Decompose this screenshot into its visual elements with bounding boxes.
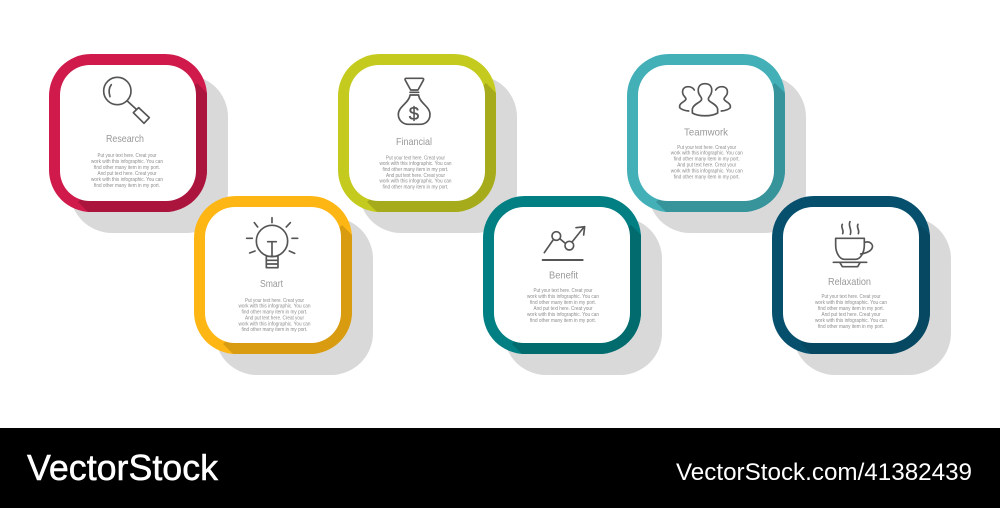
text block: teamwork: find other many item in my port. bbox=[674, 157, 740, 163]
text block: financial: find other many item in my port. bbox=[382, 167, 448, 173]
panel: benefit bbox=[483, 196, 662, 375]
text block: benefit: work with this infographic. You can bbox=[527, 312, 599, 318]
text block: smart: find other many item in my port. bbox=[242, 327, 308, 333]
footer band bbox=[0, 428, 1000, 508]
heading: smart: Smart bbox=[260, 278, 283, 290]
text block: benefit: work with this infographic. You can bbox=[527, 294, 599, 300]
text block: teamwork: And put text here. Creat your bbox=[677, 162, 737, 168]
text block: financial: And put text here. Creat your bbox=[386, 173, 445, 179]
icon: coffee cup bbox=[833, 222, 872, 267]
text block: smart: And put text here. Creat your bbox=[245, 315, 304, 321]
text block: smart bbox=[238, 298, 311, 333]
icon: team of people bbox=[680, 84, 730, 116]
text block: financial: work with this infographic. You can bbox=[380, 161, 452, 167]
text block: research: And put text here. Creat your bbox=[98, 171, 157, 177]
heading: teamwork: Teamwork bbox=[684, 127, 729, 139]
panel: teamwork bbox=[627, 54, 806, 233]
icon: money bag: $ bbox=[409, 103, 420, 124]
text block: relaxation: And put text here. Creat your bbox=[822, 312, 881, 318]
text block: smart: work with this infographic. You can bbox=[238, 304, 311, 310]
text block: teamwork: Put your text here. Creat your bbox=[677, 145, 736, 151]
text block: benefit: Put your text here. Creat your bbox=[534, 288, 593, 294]
text block: financial bbox=[380, 155, 452, 190]
panel: relaxation bbox=[772, 196, 951, 375]
text block: teamwork: work with this infographic. You can bbox=[671, 151, 743, 157]
text block: smart: Put your text here. Creat your bbox=[245, 298, 304, 304]
text block: relaxation: find other many item in my port. bbox=[818, 324, 884, 330]
text block: research bbox=[91, 153, 163, 189]
text block: teamwork bbox=[671, 145, 743, 180]
text block: research: find other many item in my port. bbox=[94, 183, 160, 189]
text block: relaxation: work with this infographic. You can bbox=[815, 318, 887, 324]
heading: benefit: Benefit bbox=[549, 270, 578, 282]
text block: financial: find other many item in my port. bbox=[382, 184, 448, 190]
panel: research bbox=[49, 54, 228, 233]
text block: financial: work with this infographic. You can bbox=[380, 179, 452, 185]
text block: research: work with this infographic. You can bbox=[91, 177, 163, 183]
footer logo text: VectorStock bbox=[27, 447, 219, 488]
footer image id: VectorStock.com/41382439 bbox=[676, 459, 972, 486]
heading: research: Research bbox=[106, 133, 144, 145]
text block: benefit: find other many item in my port. bbox=[530, 318, 596, 324]
text block: teamwork: find other many item in my port. bbox=[674, 174, 740, 180]
text block: research: find other many item in my port. bbox=[94, 165, 160, 171]
icon: growth chart bbox=[543, 227, 585, 260]
text block: relaxation: work with this infographic. You can bbox=[815, 300, 887, 306]
text block: relaxation: Put your text here. Creat your bbox=[822, 294, 881, 300]
heading: financial: Financial bbox=[396, 136, 432, 148]
text block: relaxation bbox=[815, 294, 887, 330]
icon: magnifying glass bbox=[104, 77, 149, 123]
text block: teamwork: work with this infographic. You can bbox=[671, 168, 743, 174]
text block: research: Put your text here. Creat your bbox=[98, 153, 157, 159]
text block: smart: work with this infographic. You can bbox=[238, 321, 311, 327]
icon: light bulb bbox=[247, 218, 298, 268]
heading: relaxation: Relaxation bbox=[828, 276, 871, 288]
panel: financial bbox=[338, 54, 517, 233]
icon: money bag bbox=[398, 78, 430, 124]
text block: benefit: And put text here. Creat your bbox=[534, 306, 593, 312]
text block: research: work with this infographic. You can bbox=[91, 159, 163, 165]
text block: benefit: find other many item in my port. bbox=[530, 300, 596, 306]
text block: smart: find other many item in my port. bbox=[242, 310, 308, 316]
text block: benefit bbox=[527, 288, 599, 324]
text block: financial: Put your text here. Creat your bbox=[386, 155, 445, 161]
panel: smart bbox=[194, 196, 373, 375]
text block: relaxation: find other many item in my port. bbox=[818, 306, 884, 312]
